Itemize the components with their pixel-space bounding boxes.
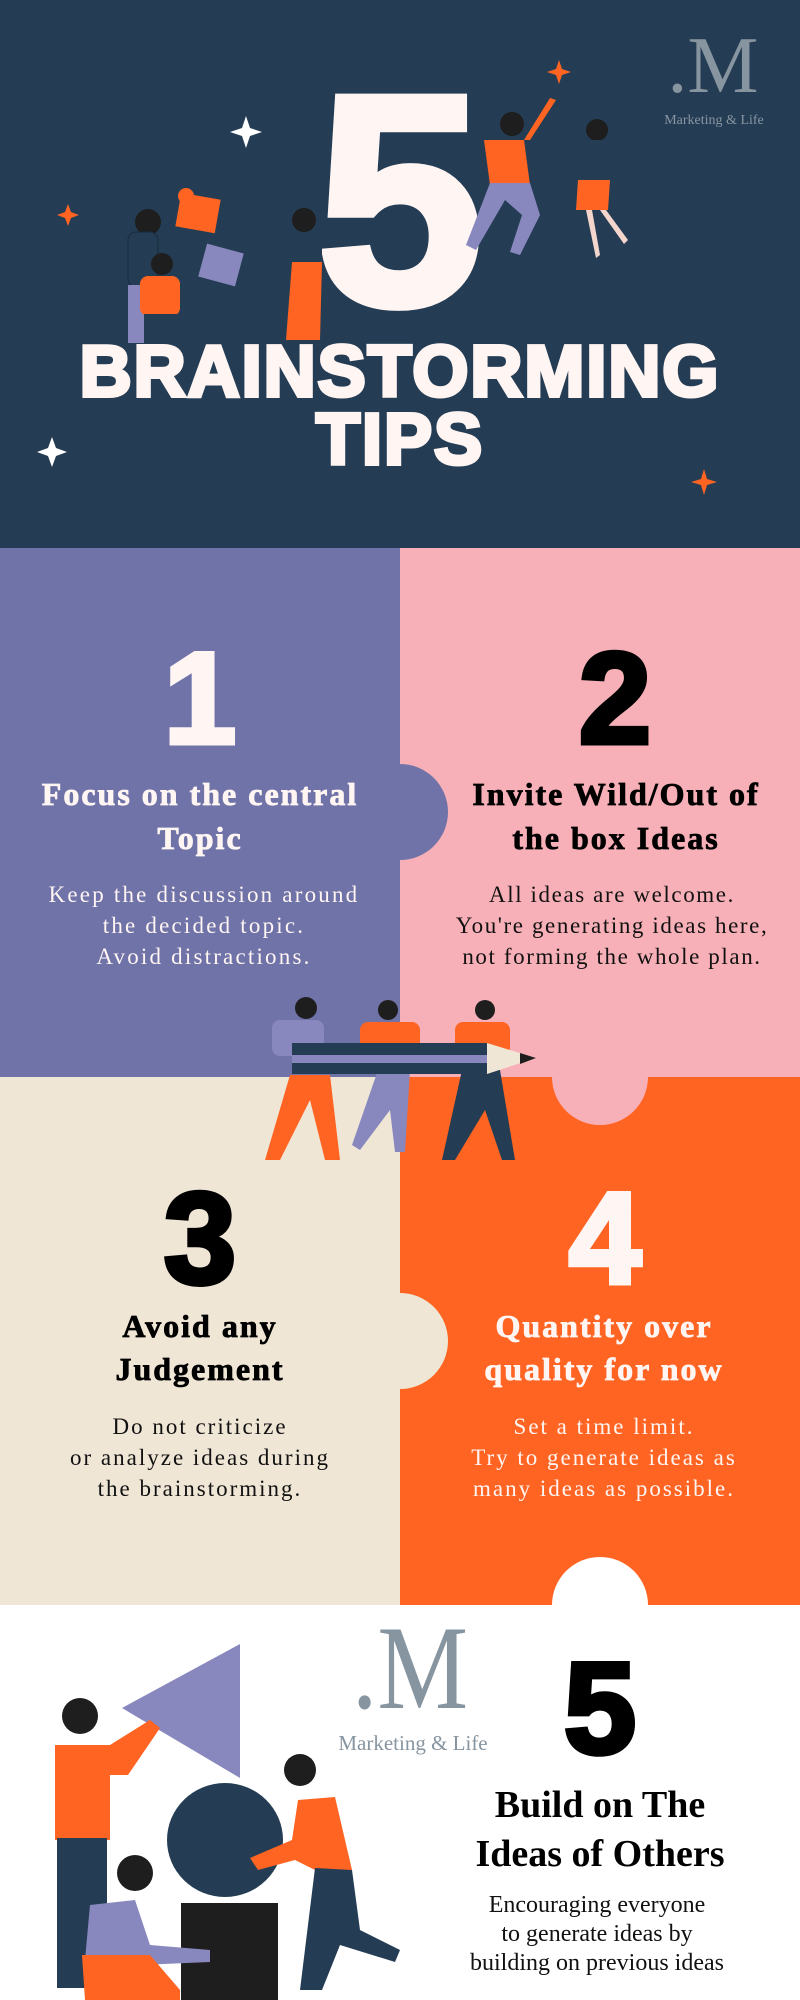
panel 4 <box>471 1165 737 1501</box>
panel 5 heading <box>475 1784 725 1875</box>
panel 5 body: to generate ideas by <box>501 1921 693 1947</box>
title: BRAINSTORMING <box>80 332 720 412</box>
panel 3: Do not criticize <box>112 1414 288 1439</box>
panel 2: 2 <box>579 625 651 771</box>
panel 1: Keep the discussion around <box>49 882 359 907</box>
logo: top right: Marketing & Life <box>664 113 764 128</box>
panel 4: quality for now <box>484 1351 724 1387</box>
panel 2: All ideas are welcome. <box>489 882 735 907</box>
panel 3: Judgement <box>115 1351 285 1387</box>
panel 1 <box>42 625 359 969</box>
panel 3: or analyze ideas during <box>70 1445 330 1470</box>
panel 2: Invite Wild/Out of <box>472 776 760 812</box>
title: TIPS <box>316 400 484 480</box>
panel 4: Try to generate ideas as <box>471 1445 737 1470</box>
panel 1: Avoid distractions. <box>96 944 312 969</box>
panel 5 body <box>470 1892 724 1976</box>
panel 5 heading: Ideas of Others <box>475 1833 725 1875</box>
illustration: team carrying pencil <box>265 997 536 1160</box>
logo: bottom <box>338 1602 488 1755</box>
panel 2: You're generating ideas here, <box>456 913 768 938</box>
header background <box>0 0 800 548</box>
big number 5: 5 <box>317 32 483 368</box>
puzzle panels <box>0 548 800 1605</box>
panel 1: 1 <box>164 625 236 771</box>
panel 2: the box Ideas <box>512 820 720 856</box>
panel 5 body: building on previous ideas <box>470 1950 724 1976</box>
number 5: 5 <box>564 1635 636 1781</box>
panel 1: Focus on the central <box>42 776 358 812</box>
panel 3: the brainstorming. <box>98 1476 302 1501</box>
panel 1: the decided topic. <box>103 913 305 938</box>
panel 2: not forming the whole plan. <box>462 944 762 969</box>
illustration: high five <box>466 98 628 258</box>
panel 1: Topic <box>157 820 243 856</box>
panel 2 <box>456 625 768 969</box>
logo: top right: .M <box>667 22 759 110</box>
stars <box>37 60 717 495</box>
panel 4: many ideas as possible. <box>473 1476 735 1501</box>
bottom section background <box>0 1557 800 2000</box>
panel 5 heading: Build on The <box>495 1784 705 1826</box>
panel 4: 4 <box>569 1165 641 1311</box>
title <box>80 332 720 480</box>
illustration: puzzle team <box>128 188 322 344</box>
panel 3: Avoid any <box>122 1308 278 1344</box>
panel 4: Quantity over <box>495 1308 713 1344</box>
illustration: building shapes <box>55 1644 400 2000</box>
panel 3 <box>70 1165 330 1501</box>
logo: bottom: .M <box>352 1602 468 1735</box>
panel 5 body: Encouraging everyone <box>489 1892 705 1918</box>
logo: bottom: Marketing & Life <box>338 1731 488 1755</box>
panel 4: Set a time limit. <box>514 1414 694 1439</box>
panel 3: 3 <box>164 1165 236 1311</box>
